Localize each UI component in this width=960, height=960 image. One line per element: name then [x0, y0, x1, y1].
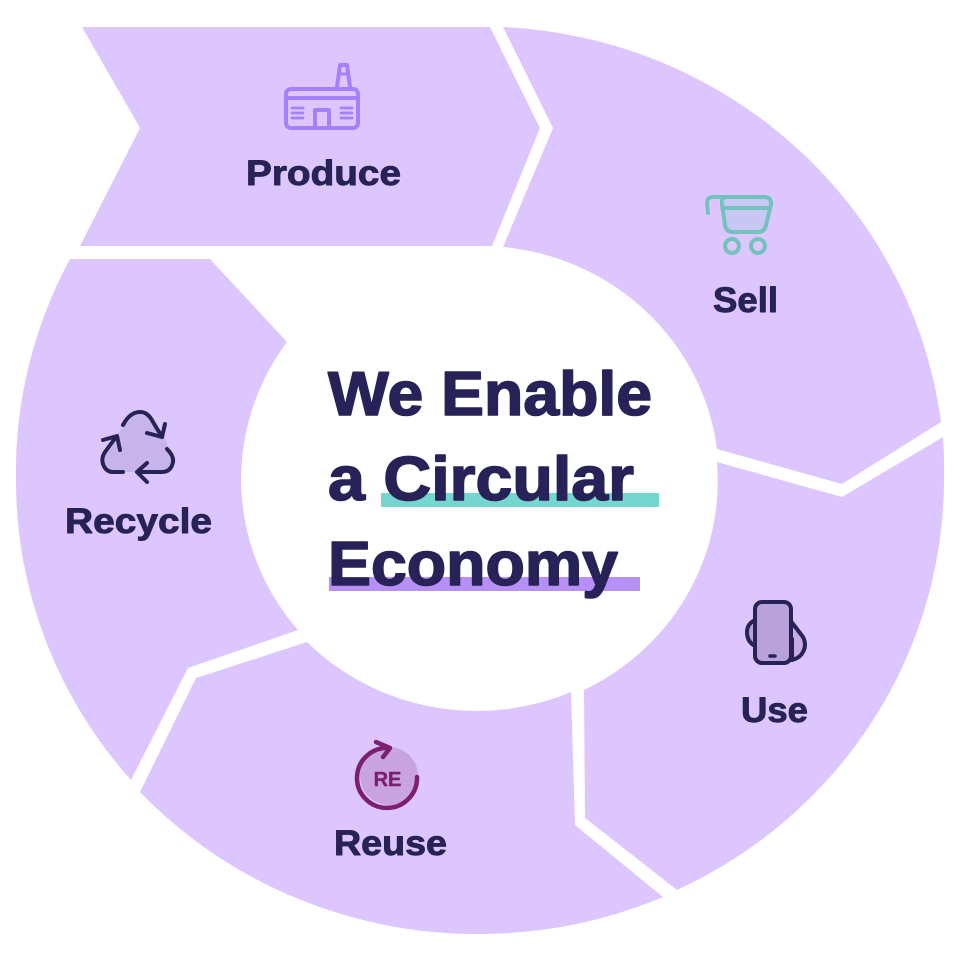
underline: Economy — [329, 577, 640, 591]
title: We Enable a Circular Economy — [328, 360, 659, 599]
icon: RE cycle — [357, 742, 418, 808]
segment: Produce — [80, 27, 540, 246]
label: Recycle: Recycle — [65, 502, 212, 541]
segment: Sell — [503, 27, 941, 484]
segment: Use — [584, 437, 944, 890]
segment: Recycle — [16, 259, 298, 780]
title line 3: Economy — [328, 530, 619, 599]
label: Use: Use — [741, 691, 808, 730]
label: Produce: Produce — [246, 154, 401, 193]
label: Reuse: Reuse — [334, 824, 447, 863]
underline: Circular — [381, 493, 659, 507]
icon: recycle arrows — [102, 412, 173, 482]
icon: RE cycle: RE — [374, 769, 401, 791]
label: Sell: Sell — [713, 281, 778, 320]
segment: Reuse — [140, 642, 663, 934]
icon: shopping cart — [707, 197, 771, 253]
title line 2: a Circular — [328, 445, 634, 514]
icon: factory — [286, 65, 358, 128]
icon: hand holding phone — [747, 602, 805, 663]
title line 1: We Enable — [328, 360, 652, 429]
